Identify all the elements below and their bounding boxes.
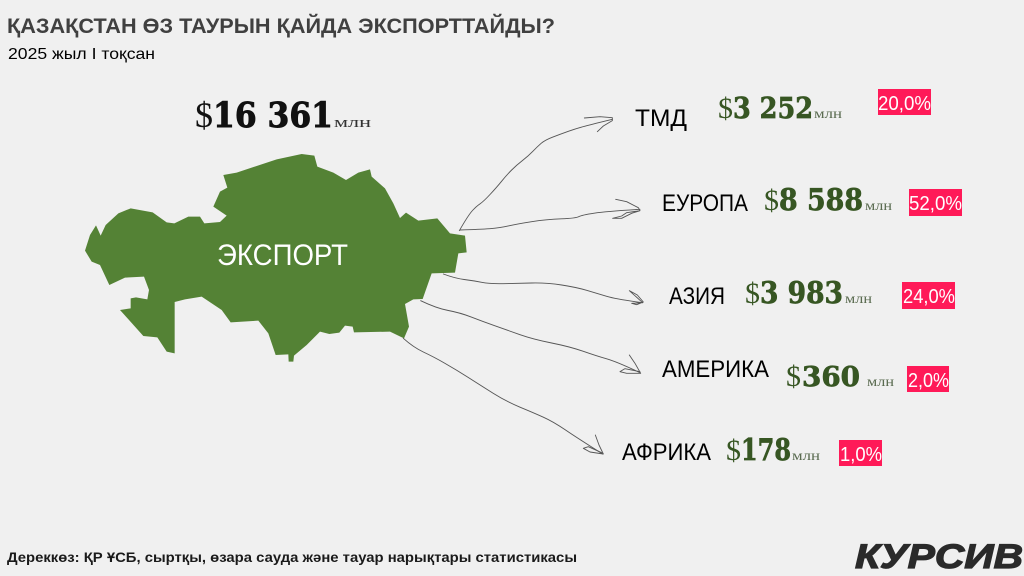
- logo: КУРСИВ: [855, 538, 1023, 576]
- row: CIS: [635, 89, 931, 132]
- row: Africa: [622, 433, 882, 468]
- unit: млн: [845, 292, 873, 307]
- row: Asia: [669, 276, 955, 311]
- unit: млн: [792, 449, 821, 464]
- value: 3 252: [733, 91, 813, 125]
- arrow: to CIS: [459, 117, 612, 231]
- share badge: 2,0%: [908, 370, 949, 392]
- unit: млн: [867, 375, 895, 390]
- value: $: [786, 360, 801, 393]
- value: 8 588: [779, 183, 863, 218]
- value: 178: [741, 433, 791, 468]
- row: Europe: [662, 183, 962, 218]
- total export value: 16 361: [213, 95, 333, 136]
- map label: ЭКСПОРТ: [217, 239, 348, 272]
- map of Kazakhstan: [85, 154, 467, 362]
- total export value: $: [195, 95, 213, 135]
- arrow: to Europe: [460, 199, 640, 230]
- subtitle: 2025 жыл I тоқсан: [8, 46, 155, 63]
- share badge: 24,0%: [903, 286, 955, 308]
- value: 360: [802, 362, 860, 393]
- value: $: [718, 92, 733, 125]
- row: America: [662, 356, 949, 393]
- value: [726, 433, 791, 468]
- arrow: to Africa: [403, 338, 603, 454]
- region label: АЗИЯ: [669, 283, 725, 310]
- value: $: [764, 184, 779, 217]
- region label: ЕУРОПА: [662, 190, 748, 217]
- title: ҚАЗАҚСТАН ӨЗ ТАУРЫН ҚАЙДА ЭКСПОРТТАЙДЫ?: [7, 14, 555, 38]
- total export value: млн: [334, 115, 371, 131]
- region label: АФРИКА: [622, 439, 711, 466]
- value: $: [726, 434, 741, 467]
- value: $: [745, 277, 760, 310]
- share badge: 1,0%: [840, 444, 882, 466]
- source note: Дереккөз: ҚР ҰСБ, сыртқы, өзара сауда және тауар нарықтары статистикасы: [7, 549, 577, 565]
- value: 3 983: [760, 276, 843, 311]
- unit: млн: [865, 199, 893, 214]
- share badge: 52,0%: [909, 193, 962, 215]
- region label: ТМД: [635, 105, 687, 132]
- share badge: 20,0%: [878, 93, 931, 115]
- arrow: to Asia: [443, 274, 643, 305]
- region label: АМЕРИКА: [662, 356, 769, 383]
- unit: млн: [814, 107, 843, 122]
- arrow: to America: [421, 301, 641, 373]
